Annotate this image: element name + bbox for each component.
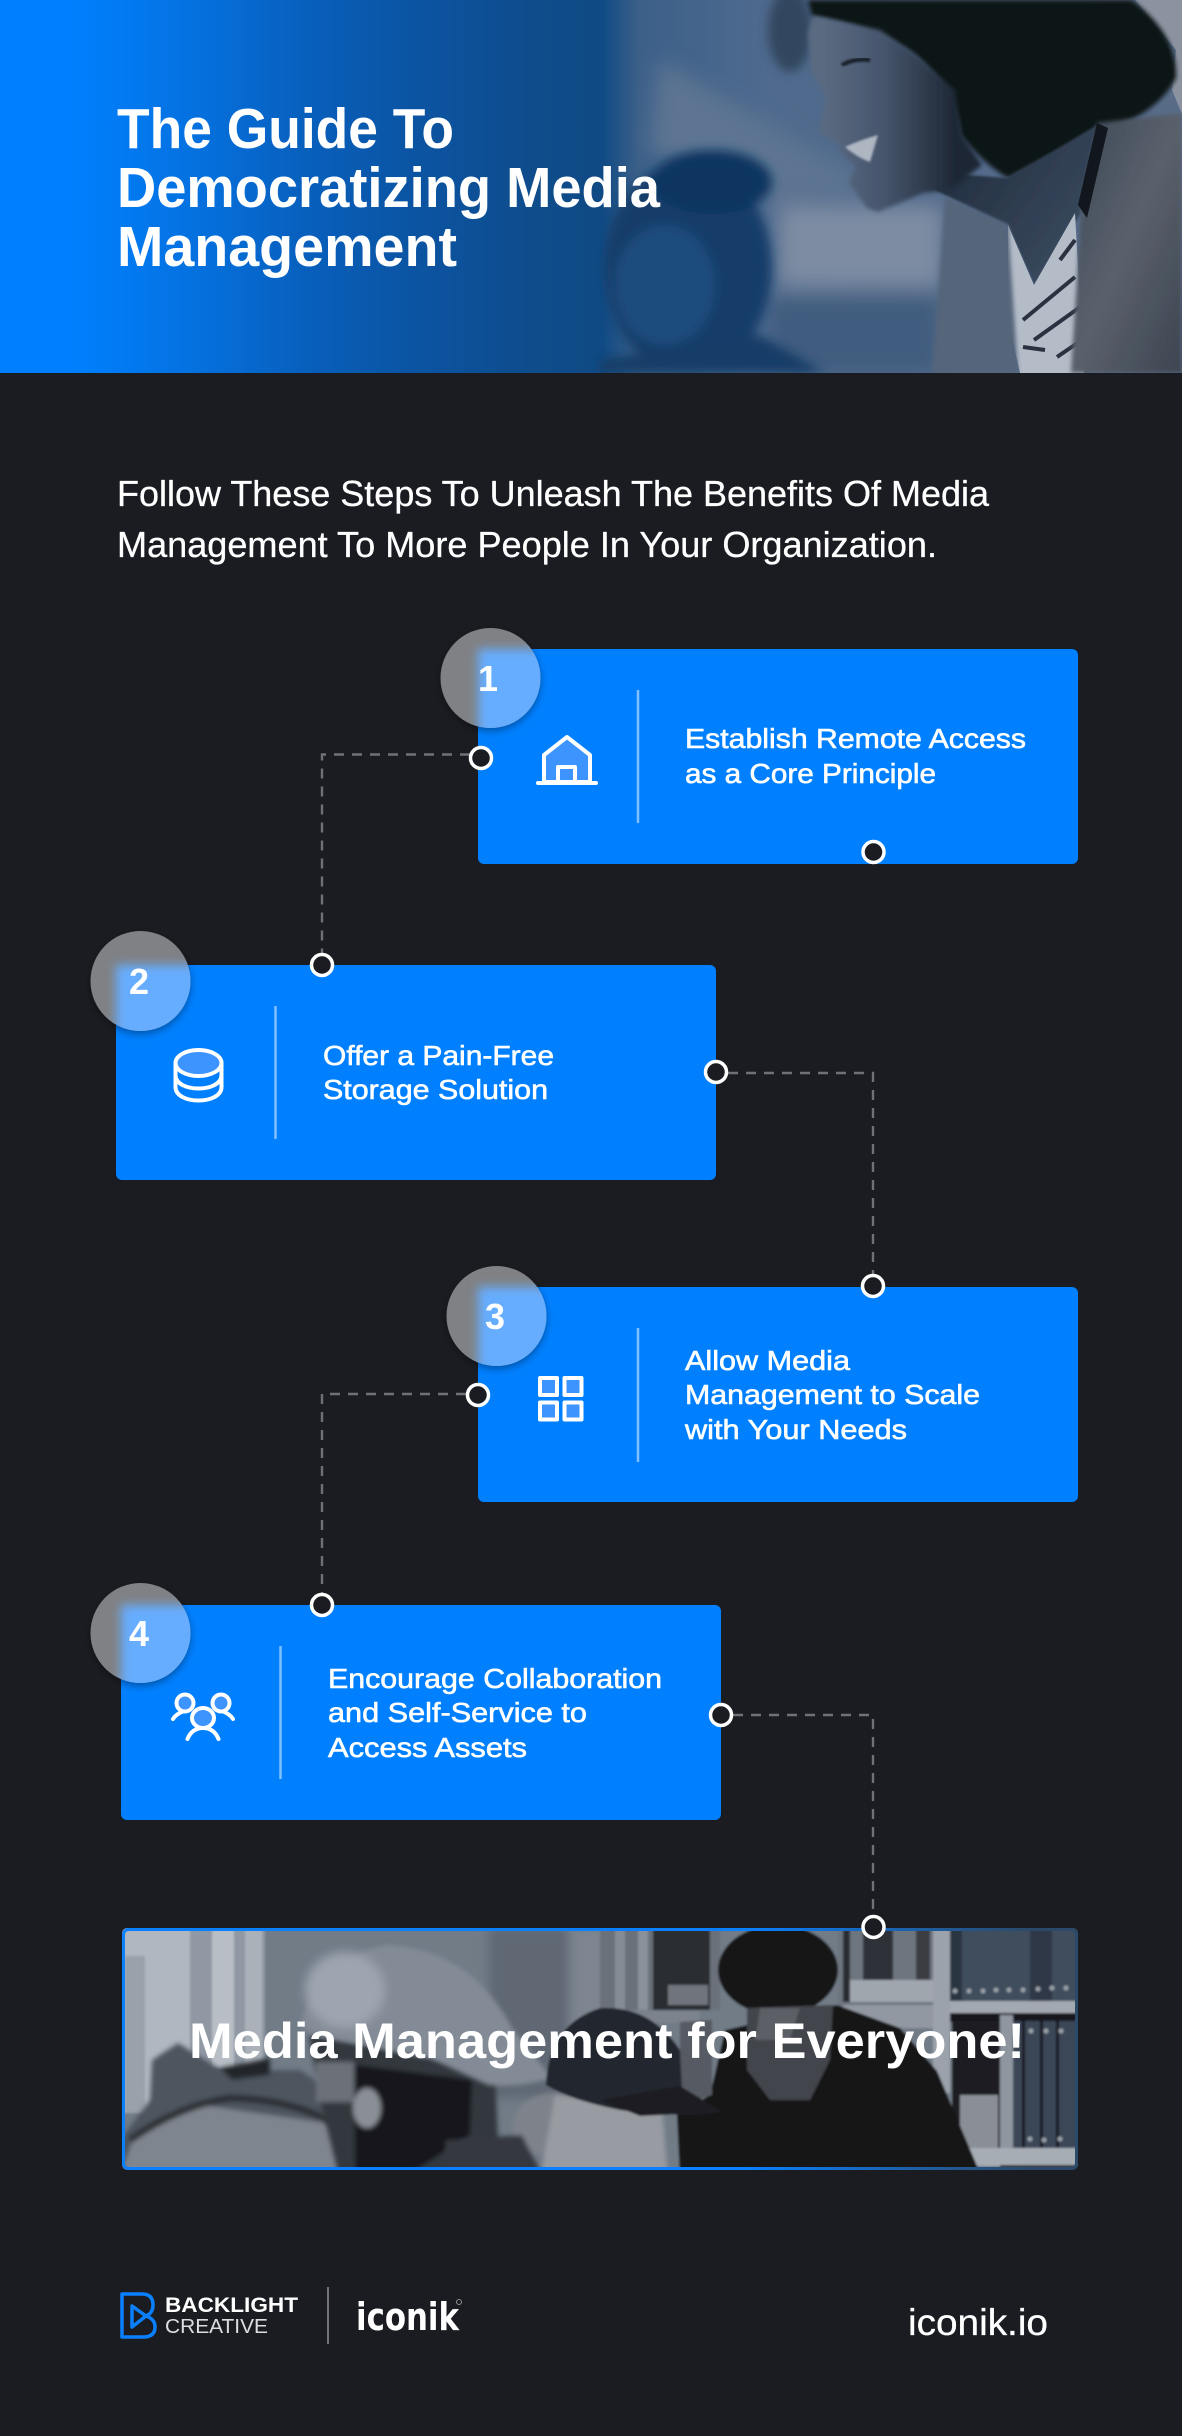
step 2 text: [323, 1040, 554, 1105]
title: Democratizing Media: [117, 156, 661, 220]
step 4 text: Access Assets: [328, 1732, 527, 1763]
banner headline: Media Management for Everyone!: [189, 2013, 1025, 2069]
connector: step 3 to step 4: [322, 1394, 466, 1593]
step 3 text: with Your Needs: [684, 1414, 907, 1445]
icon: house: [538, 737, 596, 783]
step 3 text: Management to Scale: [685, 1379, 980, 1410]
photo: left shelves: [600, 1931, 720, 2022]
banner border: [124, 1930, 1076, 2168]
badge: number 3: [446, 1266, 552, 1374]
badge: number 2: 2: [129, 961, 149, 1002]
photo: right person: [677, 1925, 983, 2180]
photo: hooded cap: [300, 1945, 552, 2086]
connector: step 1 to step 2: [322, 754, 470, 953]
photo: window: [122, 1928, 266, 2114]
step 3 text: Allow Media: [685, 1345, 850, 1376]
icon: database: [176, 1050, 222, 1100]
website url: iconik.io: [908, 2302, 1048, 2343]
panel: step 3: [478, 1287, 1078, 1502]
panel: step 2: [116, 965, 716, 1180]
title: The Guide To: [117, 97, 454, 161]
step 4 text: and Self-Service to: [328, 1697, 587, 1728]
step 3 text: [684, 1345, 980, 1445]
photo: right bookshelf: [949, 1928, 1078, 2170]
photo: woman right jacket: [1071, 113, 1182, 373]
badge: number 4: [90, 1583, 196, 1691]
subtitle: [117, 473, 990, 565]
panel: step 1: [478, 649, 1078, 864]
icon: grid: [540, 1378, 582, 1420]
subtitle: Follow These Steps To Unleash The Benefits Of Media: [117, 473, 990, 514]
photo: woman hair wisps: [768, 0, 812, 72]
icon: people: [173, 1694, 233, 1739]
badge: number 3: 3: [485, 1296, 505, 1337]
photo: woman neck: [936, 125, 1096, 284]
logo: iconik: iconik: [356, 2295, 460, 2339]
photo: woman hair: [808, 0, 1176, 178]
photo: woman shirt: [1008, 213, 1084, 373]
photo: left person body: [122, 2040, 336, 2168]
badge: number 1: [440, 628, 546, 736]
header banner with photo: [0, 0, 1182, 374]
connector: step 2 to step 3: [728, 1073, 873, 1274]
icon: Backlight B mark: [122, 2294, 155, 2337]
step 1 text: as a Core Principle: [685, 758, 936, 789]
photo: centre person face: [443, 2091, 668, 2167]
step 1 text: Establish Remote Access: [685, 723, 1026, 754]
photo: centre person cap: [546, 2008, 723, 2116]
photo: rear wall: [489, 1928, 610, 2098]
logo: Backlight Creative: CREATIVE: [165, 2316, 268, 2338]
photo: collar shadow: [1078, 123, 1108, 218]
badge: number 1: 1: [478, 658, 498, 699]
photo: hood highlight: [305, 1952, 385, 2028]
step 1 text: [685, 723, 1026, 789]
photo: woman face: [808, 16, 982, 212]
photo: man in background: [600, 150, 825, 374]
connector: step 4 to closing banner: [733, 1715, 873, 1915]
subtitle: Management To More People In Your Organization.: [117, 524, 937, 565]
photo: middle shelves: [838, 1918, 950, 2093]
step 2 text: Storage Solution: [323, 1074, 548, 1105]
connector nodes: [312, 748, 884, 1938]
badge: number 2: [90, 931, 196, 1039]
panel: step 4: [121, 1605, 721, 1820]
step 4 text: Encourage Collaboration: [328, 1663, 662, 1694]
badge: number 4: 4: [129, 1613, 149, 1654]
photo: man with hood, dark face: [309, 2035, 498, 2180]
photo: woman eye and smile: [842, 60, 878, 162]
photo: top right wall: [1135, 0, 1182, 114]
step 4 text: [328, 1663, 662, 1763]
title: Management: [117, 215, 457, 279]
closing banner with photo: [112, 1918, 1088, 2180]
title: [117, 97, 661, 279]
step 2 text: Offer a Pain-Free: [323, 1040, 554, 1071]
photo: woman left jacket: [932, 197, 1018, 373]
logo: Backlight Creative: BACKLIGHT: [165, 2294, 298, 2317]
photo: book spine dots: [952, 1986, 1068, 2142]
logo: Backlight Creative: [122, 2294, 298, 2338]
photo: background light band: [650, 60, 943, 373]
